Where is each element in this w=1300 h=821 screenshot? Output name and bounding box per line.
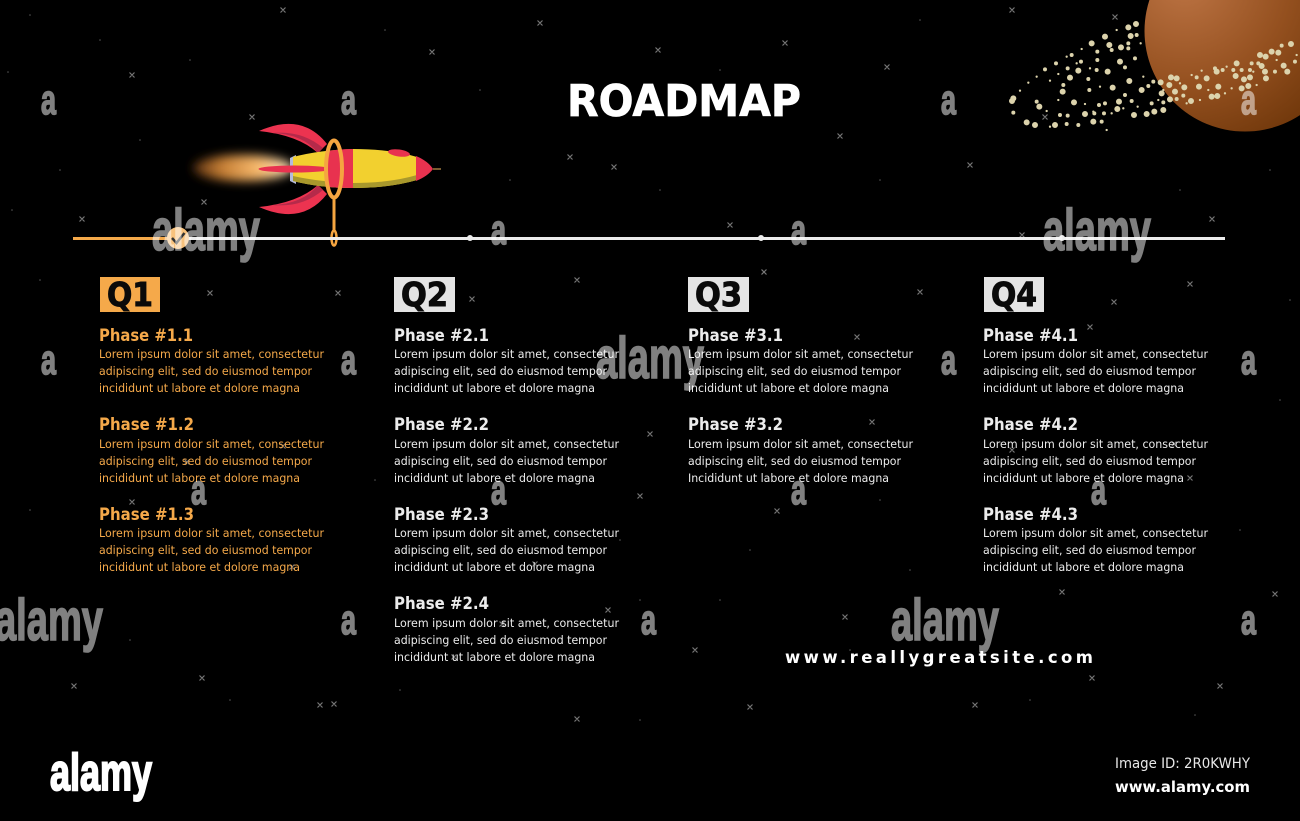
column Q4 xyxy=(983,275,1208,574)
image id: Image ID: 2R0KWHY xyxy=(1115,756,1250,772)
watermarks: a xyxy=(1241,596,1256,643)
phase 2.2 xyxy=(394,415,619,485)
column Q2 xyxy=(394,275,619,664)
column Q1 xyxy=(99,275,324,574)
phase 2.3 xyxy=(394,505,619,574)
phase 1.3: incididunt ut labore et dolore magna xyxy=(99,560,300,574)
phase 2.1: adipiscing elit, sed do eiusmod tempor xyxy=(394,364,607,378)
phase 4.3: adipiscing elit, sed do eiusmod tempor xyxy=(983,543,1196,557)
phase 1.2: Lorem ipsum dolor sit amet, consectetur xyxy=(99,437,324,451)
phase 2.1 xyxy=(394,326,619,395)
phase 1.1: Lorem ipsum dolor sit amet, consectetur xyxy=(99,347,324,361)
phase 2.3: adipiscing elit, sed do eiusmod tempor xyxy=(394,543,607,557)
phase 3.1: adipiscing elit, sed do eiusmod tempor xyxy=(688,364,901,378)
footer bar xyxy=(0,740,1300,821)
rocket bottom fin xyxy=(259,185,327,214)
watermarks: a xyxy=(341,76,356,123)
phase 2.4: Phase #2.4 xyxy=(394,594,489,613)
phase 3.1: Phase #3.1 xyxy=(688,326,783,345)
phase 4.3: Phase #4.3 xyxy=(983,505,1078,524)
phase 2.2: Phase #2.2 xyxy=(394,415,489,434)
phase 4.2: incididunt ut labore et dolore magna xyxy=(983,471,1184,485)
phase 2.1: Phase #2.1 xyxy=(394,326,489,345)
watermarks: alamy xyxy=(891,588,999,653)
rocket top fin xyxy=(259,124,327,153)
alamy logo: alamy xyxy=(50,744,152,802)
phase 4.3 xyxy=(983,505,1208,574)
rocket band xyxy=(328,149,353,188)
phase 3.2 xyxy=(688,415,913,485)
watermarks: a xyxy=(941,76,956,123)
watermarks: a xyxy=(341,336,356,383)
rocket hatch xyxy=(388,148,410,158)
watermarks: a xyxy=(41,76,56,123)
phase 4.1: incididunt ut labore et dolore magna xyxy=(983,381,1184,395)
watermarks: a xyxy=(791,206,806,253)
phase 4.3: incididunt ut labore et dolore magna xyxy=(983,560,1184,574)
badge Q1: Q1 xyxy=(107,275,153,314)
watermarks: a xyxy=(641,596,656,643)
phase 1.2: Phase #1.2 xyxy=(99,415,194,434)
watermarks: alamy xyxy=(596,326,704,391)
phase 2.3: incididunt ut labore et dolore magna xyxy=(394,560,595,574)
watermarks: a xyxy=(491,206,506,253)
phase 3.2: adipiscing elit, sed do eiusmod tempor xyxy=(688,454,901,468)
title: ROADMAP xyxy=(567,76,801,127)
phase 4.2: Lorem ipsum dolor sit amet, consectetur xyxy=(983,437,1208,451)
phase 2.4: adipiscing elit, sed do eiusmod tempor xyxy=(394,633,607,647)
watermarks: a xyxy=(491,466,506,513)
watermarks: a xyxy=(341,596,356,643)
phase 4.2: adipiscing elit, sed do eiusmod tempor xyxy=(983,454,1196,468)
phase 3.2: Incididunt ut labore et dolore magna xyxy=(688,471,889,485)
phase 2.4 xyxy=(394,594,619,664)
phase 1.3: adipiscing elit, sed do eiusmod tempor xyxy=(99,543,312,557)
planet xyxy=(1012,0,1300,132)
watermarks: a xyxy=(1241,76,1256,123)
watermarks: a xyxy=(1091,466,1106,513)
phase 4.1: Phase #4.1 xyxy=(983,326,1078,345)
phase 1.2: adipiscing elit, sed do eiusmod tempor xyxy=(99,454,312,468)
phase 3.2: Phase #3.2 xyxy=(688,415,783,434)
phase 1.2: incididunt ut labore et dolore magna xyxy=(99,471,300,485)
watermarks: a xyxy=(791,466,806,513)
watermarks: a xyxy=(941,336,956,383)
asteroid dust trail xyxy=(1012,24,1297,130)
badge Q3: Q3 xyxy=(695,275,742,314)
watermarks: alamy xyxy=(1043,198,1151,263)
phase 1.1: Phase #1.1 xyxy=(99,326,193,345)
icon: check milestone xyxy=(167,227,189,249)
phase 3.1: incididunt ut labore et dolore magna xyxy=(688,381,889,395)
phase 3.2: Lorem ipsum dolor sit amet, consectetur xyxy=(688,437,913,451)
phase 4.1: Lorem ipsum dolor sit amet, consectetur xyxy=(983,347,1208,361)
phase 3.1: Lorem ipsum dolor sit amet, consectetur xyxy=(688,347,913,361)
milestone ring xyxy=(326,140,342,246)
phase 4.2 xyxy=(983,415,1208,485)
rocket nose xyxy=(416,156,433,181)
column Q3 xyxy=(688,275,913,485)
phase 2.2: incididunt ut labore et dolore magna xyxy=(394,471,595,485)
rocket nozzle xyxy=(290,155,296,184)
phase 2.4: Lorem ipsum dolor sit amet, consectetur xyxy=(394,616,619,630)
watermarks xyxy=(0,76,1256,653)
phase 4.2: Phase #4.2 xyxy=(983,415,1078,434)
badge Q4: Q4 xyxy=(991,275,1037,314)
phase 4.1 xyxy=(983,326,1208,395)
phase 2.1: incididunt ut labore et dolore magna xyxy=(394,381,595,395)
phase 2.4: incididunt ut labore et dolore magna xyxy=(394,650,595,664)
phase 2.3: Phase #2.3 xyxy=(394,505,489,524)
badge Q2: Q2 xyxy=(401,275,448,314)
phase 1.3 xyxy=(99,505,324,574)
phase 1.3: Lorem ipsum dolor sit amet, consectetur xyxy=(99,526,324,540)
phase 3.1 xyxy=(688,326,913,395)
phase 1.2 xyxy=(99,415,324,485)
watermarks: alamy xyxy=(152,198,260,263)
phase 1.1 xyxy=(99,326,324,395)
timeline xyxy=(73,227,1225,249)
watermarks: a xyxy=(191,466,206,513)
rocket xyxy=(193,124,441,246)
phase 4.3: Lorem ipsum dolor sit amet, consectetur xyxy=(983,526,1208,540)
phase 1.3: Phase #1.3 xyxy=(99,505,194,524)
phase 2.3: Lorem ipsum dolor sit amet, consectetur xyxy=(394,526,619,540)
watermarks: a xyxy=(1241,336,1256,383)
phase 4.1: adipiscing elit, sed do eiusmod tempor xyxy=(983,364,1196,378)
watermarks: a xyxy=(41,336,56,383)
phase 2.2: Lorem ipsum dolor sit amet, consectetur xyxy=(394,437,619,451)
rocket body xyxy=(293,149,417,188)
website: www.reallygreatsite.com xyxy=(785,648,1093,667)
phase 2.1: Lorem ipsum dolor sit amet, consectetur xyxy=(394,347,619,361)
rocket flame xyxy=(193,155,293,181)
phase 1.1: adipiscing elit, sed do eiusmod tempor xyxy=(99,364,312,378)
phase 2.2: adipiscing elit, sed do eiusmod tempor xyxy=(394,454,607,468)
alamy url: www.alamy.com xyxy=(1115,778,1250,796)
phase 1.1: incididunt ut labore et dolore magna xyxy=(99,381,300,395)
rocket centre fin xyxy=(258,166,330,172)
